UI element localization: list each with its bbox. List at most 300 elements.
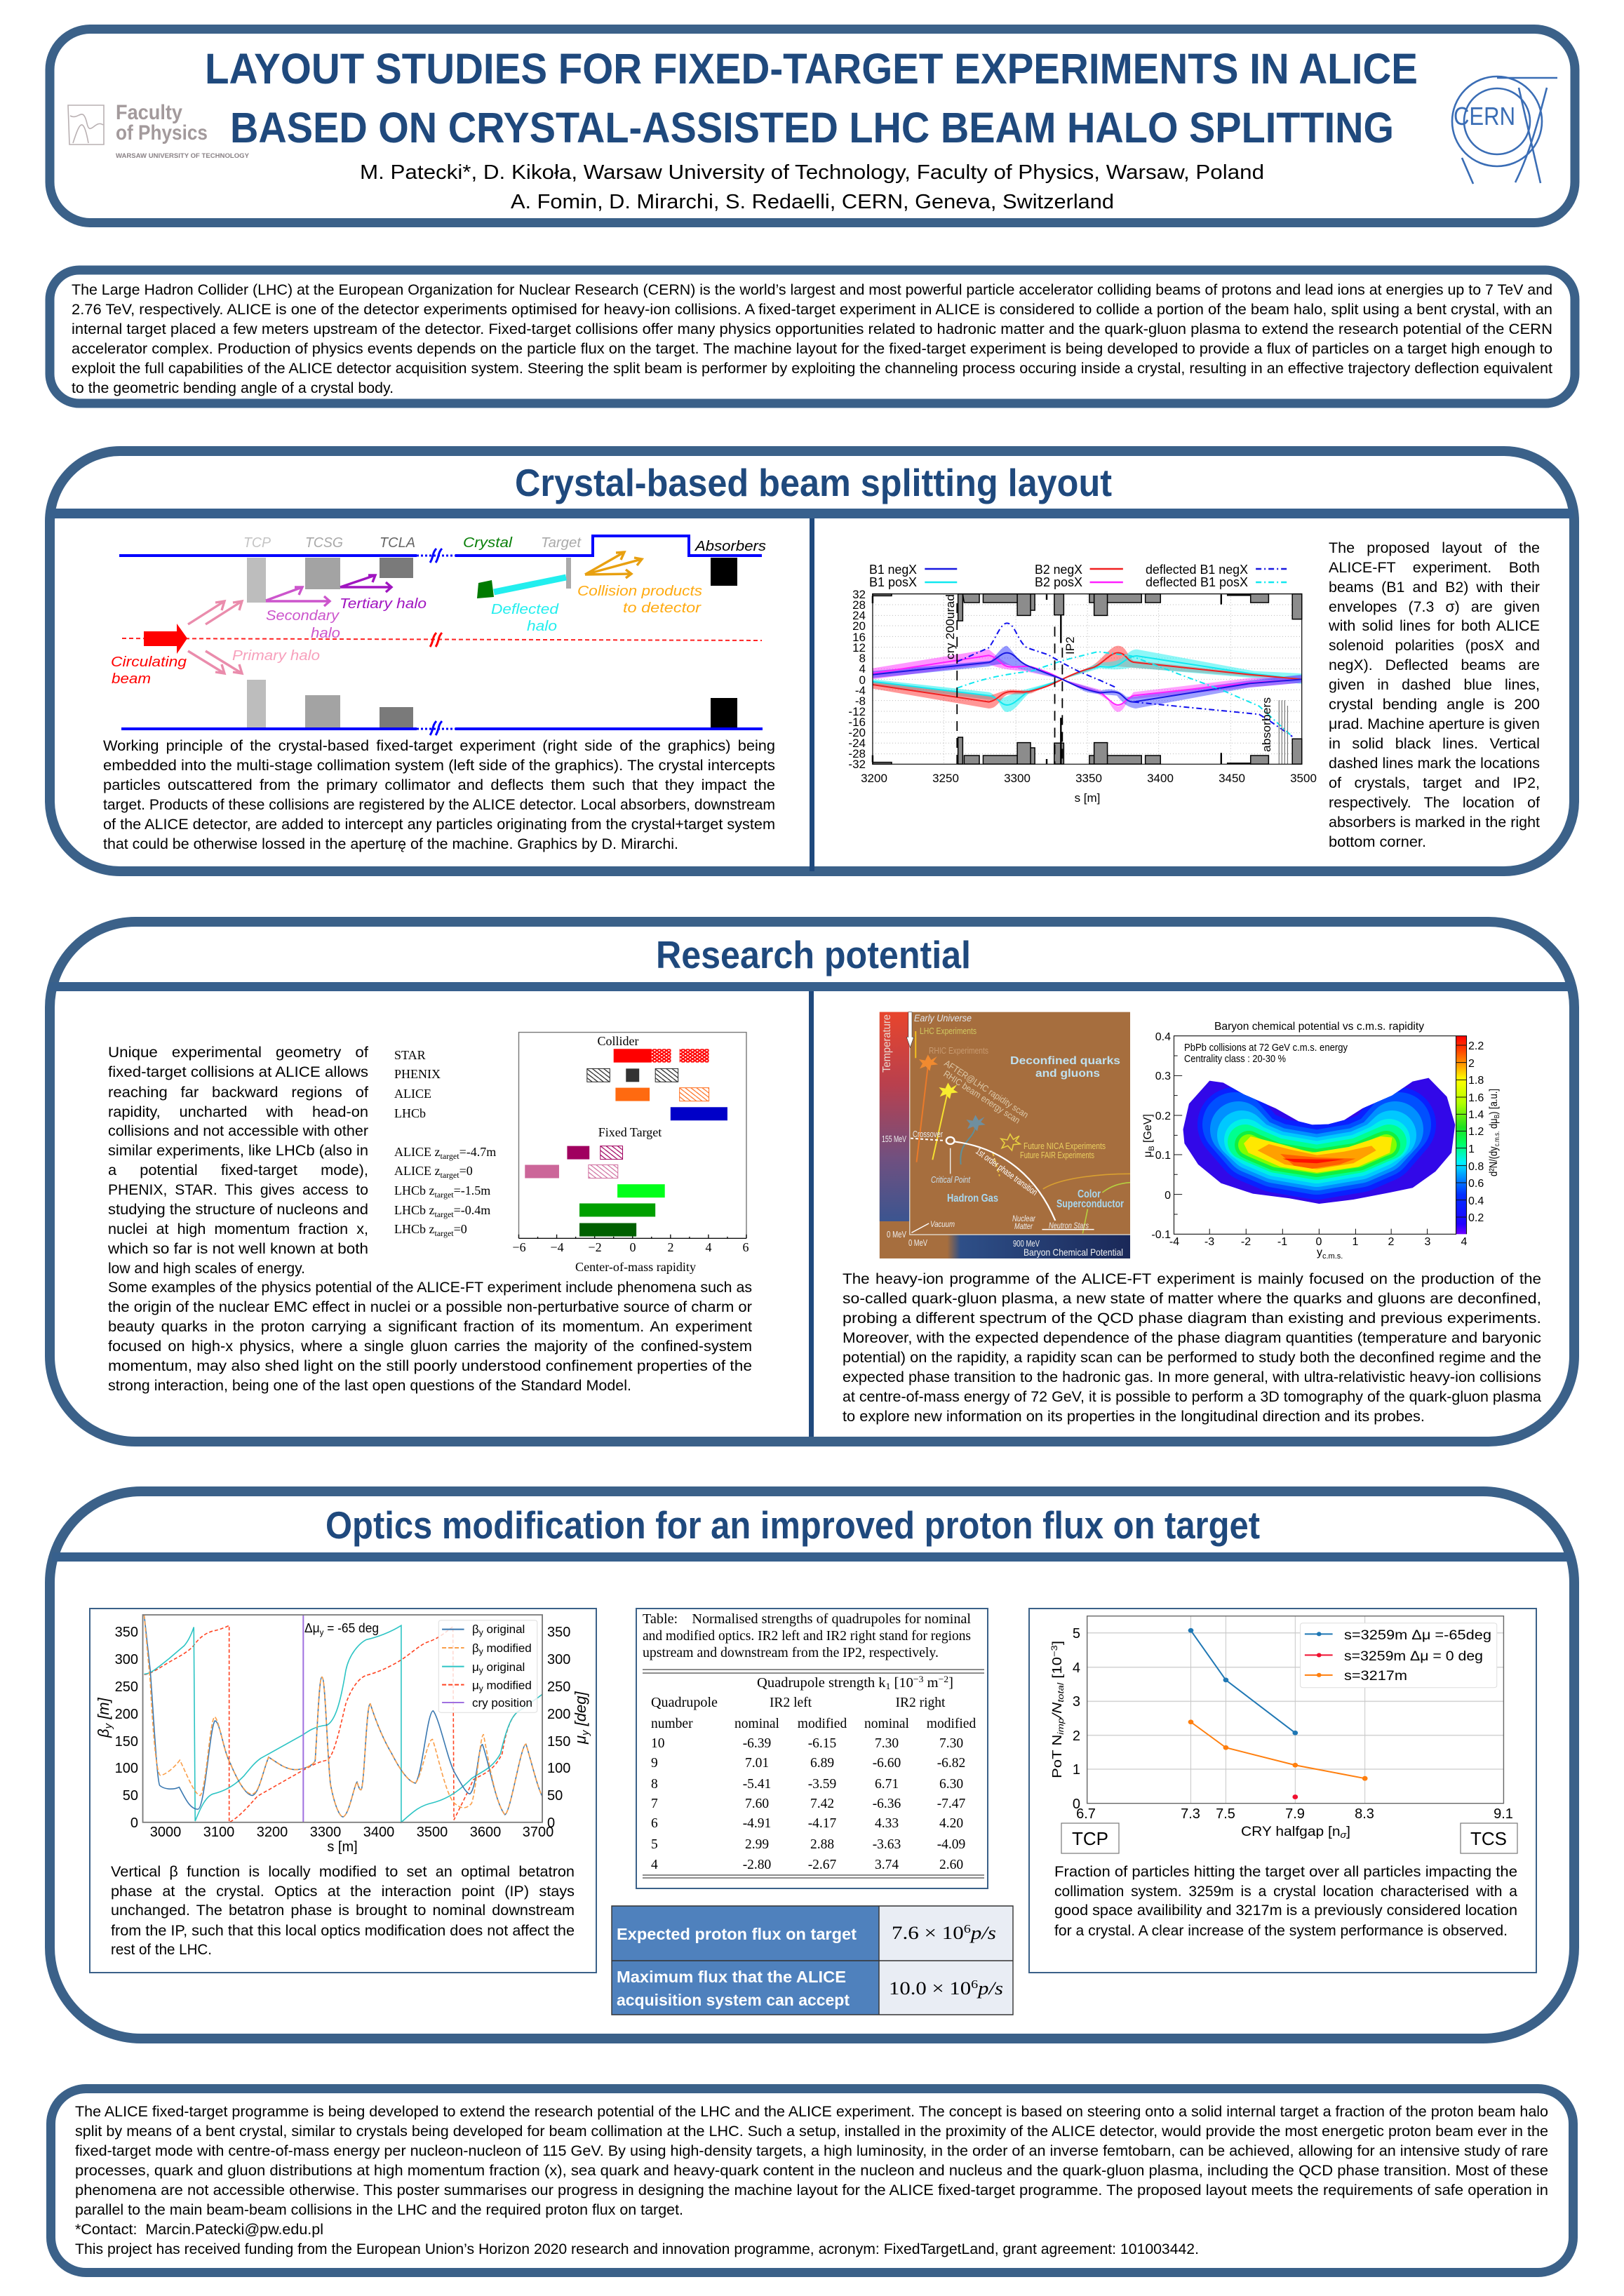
axis labels: μ bbox=[572, 1736, 589, 1744]
axis labels: 0 bbox=[1073, 1797, 1080, 1812]
text block: diagram caption: that could be otherwise lossed in the aperturę of the machine. Graphics by D. Mirarchi. bbox=[103, 836, 678, 852]
table rows: 7.30 bbox=[875, 1736, 899, 1751]
legend: μ bbox=[472, 1660, 479, 1674]
text block: introduction: to the geometric bending angle of a crystal body. bbox=[72, 380, 394, 396]
text block: layout description: given in dashed blue lines, bbox=[1329, 677, 1540, 693]
diagram labels: Deflected bbox=[491, 602, 559, 617]
axis labels: 3100 bbox=[203, 1825, 234, 1840]
envelopes bands bbox=[873, 650, 1062, 679]
inner contour peaks bbox=[1174, 1036, 1467, 1234]
contour axes: c.m.s. bbox=[1322, 1252, 1343, 1261]
contour axes: -1 bbox=[1277, 1236, 1287, 1248]
axis labels: 300 bbox=[547, 1652, 570, 1667]
contour axes: 0.3 bbox=[1155, 1070, 1171, 1082]
text block: performance caption: collimation system. 3259m is a crystal location characterised with a bbox=[1054, 1884, 1517, 1900]
phase diagram labels: 155 MeV bbox=[882, 1134, 906, 1144]
table header: 1 bbox=[886, 1681, 890, 1691]
phase diagram labels: RHIC Experiments bbox=[929, 1045, 988, 1056]
axis labels: s [m] bbox=[327, 1839, 358, 1855]
contour axes: 2.2 bbox=[1468, 1040, 1484, 1052]
axis labels: y bbox=[579, 1729, 591, 1736]
heading: Optics modification for an improved proton flux on target bbox=[326, 1503, 1260, 1547]
table rows: 7 bbox=[651, 1797, 658, 1811]
chart labels: 4 bbox=[706, 1240, 711, 1254]
axis tick labels: 4 bbox=[859, 662, 866, 676]
table rows: 6.30 bbox=[939, 1777, 963, 1792]
table rows: 7.30 bbox=[939, 1736, 963, 1751]
table rows: -6.39 bbox=[743, 1736, 771, 1751]
chart labels: =0 bbox=[454, 1222, 467, 1236]
axis labels: 200 bbox=[547, 1707, 570, 1722]
TCP label box: TCP bbox=[1072, 1828, 1108, 1849]
axis labels: 9.1 bbox=[1494, 1806, 1513, 1822]
table rows: -4.91 bbox=[743, 1816, 771, 1831]
text block: layout description: crystal bending angle is 200 bbox=[1329, 697, 1540, 713]
table header: IR2 left bbox=[770, 1696, 812, 1710]
heading: Crystal-based beam splitting layout bbox=[515, 461, 1112, 504]
envelope curves bbox=[873, 653, 1302, 705]
text block: rapidity coverage: reaching far backward regions of bbox=[108, 1085, 368, 1101]
authors: A. Fomin, D. Mirarchi, S. Redaelli, CERN, Geneva, Switzerland bbox=[511, 191, 1114, 213]
text block: rapidity coverage: similar experiments, like LHCb (also in bbox=[108, 1143, 368, 1159]
title: BASED ON CRYSTAL-ASSISTED LHC BEAM HALO SPLITTING bbox=[230, 104, 1394, 152]
axis labels: 200 bbox=[115, 1707, 138, 1722]
x axis labels: 3200 bbox=[861, 772, 887, 785]
panel: title header bbox=[50, 29, 1575, 223]
contour axes: 0 bbox=[1316, 1236, 1322, 1248]
text block: layout description: beams (B1 and B2) with their bbox=[1329, 579, 1540, 596]
text block: quark-gluon plasma programme bbox=[843, 1271, 1541, 1425]
phase diagram labels: RHIC beam energy scan bbox=[941, 1068, 1022, 1126]
legend: B2 posX bbox=[1035, 575, 1082, 589]
panel: quadrupole strength table bbox=[636, 1609, 988, 1888]
axis labels: 3700 bbox=[523, 1825, 553, 1840]
table rows: -3.63 bbox=[873, 1837, 901, 1852]
axis labels: 350 bbox=[115, 1625, 138, 1640]
contour axes: -0.1 bbox=[1151, 1229, 1171, 1241]
contour axes: -3 bbox=[1204, 1236, 1214, 1248]
axis labels bbox=[95, 1621, 591, 1855]
contour axes: μ bbox=[1142, 1151, 1154, 1157]
text block: introduction bbox=[72, 282, 1552, 396]
table rows: -6.36 bbox=[873, 1797, 901, 1811]
icon: Faculty of Physics logo: WARSAW UNIVERSITY OF TECHNOLOGY bbox=[116, 152, 249, 159]
x axis labels: 3500 bbox=[1290, 772, 1317, 785]
chart labels: Center-of-mass rapidity bbox=[575, 1260, 696, 1274]
contour axes: 3 bbox=[1425, 1236, 1431, 1248]
title: LAYOUT STUDIES FOR FIXED-TARGET EXPERIMENTS IN ALICE bbox=[205, 45, 1418, 93]
phase diagram labels: Matter bbox=[1014, 1221, 1033, 1231]
panel: beta function chart bbox=[90, 1609, 596, 1973]
text block: physics potential bbox=[108, 1280, 752, 1394]
text block: summary: The ALICE fixed-target programme is being developed to extend the research potential of the LHC and the ALICE experiment. The concept is based on steering onto a solid internal target a fraction of the proton beam halo bbox=[75, 2104, 1548, 2120]
table rows: 2.60 bbox=[939, 1858, 963, 1872]
text block: physics potential: strong interaction, being one of the last open questions of the Standard Model. bbox=[108, 1378, 631, 1394]
axis labels: 3600 bbox=[470, 1825, 501, 1840]
diagram labels: Tertiary halo bbox=[340, 596, 427, 612]
axis tick labels: 24 bbox=[852, 609, 866, 622]
axis labels: 8.3 bbox=[1355, 1806, 1374, 1822]
contour axes: B bbox=[1494, 1115, 1501, 1118]
legend bbox=[869, 563, 1248, 589]
diagram labels: Circulating bbox=[111, 654, 187, 670]
aperture bbox=[873, 594, 1302, 764]
table rows: -6.60 bbox=[873, 1756, 901, 1771]
table header: nominal bbox=[864, 1717, 910, 1731]
phase diagram labels: Future FAIR Experiments bbox=[1020, 1150, 1094, 1160]
axis labels: ] bbox=[1050, 1641, 1064, 1645]
table header: IR2 right bbox=[896, 1696, 946, 1710]
text block: layout description: ALICE-FT experiment. Both bbox=[1329, 560, 1540, 576]
text block: summary: This project has received funding from the European Union’s Horizon 2020 research and innovation programme, acronym: FixedTargetLand, grant agreement: 101003442. bbox=[75, 2241, 1199, 2257]
table rows: 7.42 bbox=[810, 1797, 834, 1811]
legend bbox=[1344, 1628, 1491, 1684]
axis tick labels: 32 bbox=[852, 588, 866, 601]
phase diagram labels: Superconductor bbox=[1056, 1198, 1124, 1210]
axis tick labels: 0 bbox=[859, 673, 866, 687]
chart labels: =-1.5m bbox=[454, 1183, 490, 1197]
legend: original bbox=[483, 1660, 525, 1674]
axis tick labels: -24 bbox=[848, 737, 866, 750]
phase diagram labels: Hadron Gas bbox=[947, 1193, 998, 1204]
panel: research potential bbox=[50, 922, 1574, 1442]
text block: rapidity coverage: studying the structure of nucleons and bbox=[108, 1202, 368, 1218]
text block: layout description: absorbers is marked in the right bbox=[1329, 814, 1540, 831]
text block: physics potential: Some examples of the physics potential of the ALICE-FT experiment include phenomena such as bbox=[108, 1280, 752, 1296]
axis tick labels: -8 bbox=[855, 694, 866, 708]
chart labels: 0 bbox=[630, 1240, 636, 1254]
phase diagram labels bbox=[881, 1012, 1124, 1258]
text block: performance caption bbox=[1054, 1864, 1517, 1939]
axis labels: 3200 bbox=[257, 1825, 288, 1840]
crystal and deflected beam bbox=[477, 577, 566, 598]
contour axes: -4 bbox=[1169, 1236, 1179, 1248]
contour axes: 0.8 bbox=[1468, 1161, 1484, 1173]
text block: quark-gluon plasma programme: to explore new information on its properties in the longitudinal direction and its probes. bbox=[843, 1409, 1425, 1425]
chart: QCD phase diagram bbox=[880, 1012, 1130, 1258]
table header bbox=[651, 1674, 976, 1731]
phase diagram labels: Temperature bbox=[881, 1014, 893, 1073]
text block: performance caption: Fraction of particles hitting the target over all particles impacting the bbox=[1054, 1864, 1517, 1880]
legend lines bbox=[925, 568, 957, 570]
table: proton flux: Expected proton flux on target bbox=[617, 1925, 857, 1943]
diagram labels: Collision products bbox=[577, 584, 702, 599]
contour axes: d²N/(dy bbox=[1488, 1140, 1500, 1176]
contour axes: 0.6 bbox=[1468, 1178, 1484, 1190]
axis tick labels: -12 bbox=[848, 705, 866, 718]
chart labels: target bbox=[440, 1151, 459, 1161]
legend: modified bbox=[483, 1642, 532, 1655]
chart: beta and phase vs s bbox=[95, 1615, 591, 1855]
table rows: -3.59 bbox=[808, 1777, 836, 1792]
text block: quark-gluon plasma programme: so-called quark-gluon plasma, a new state of matter where the quarks and gluons are deconfined, bbox=[843, 1291, 1541, 1307]
axis labels: 0 bbox=[130, 1815, 138, 1831]
table rows: -2.80 bbox=[743, 1858, 771, 1872]
table rows: 6 bbox=[651, 1816, 658, 1831]
phase diagram labels: Nuclear bbox=[1012, 1214, 1036, 1223]
chart labels: LHCb z bbox=[394, 1183, 435, 1197]
chart: baryon chemical potential contour bbox=[1142, 1021, 1501, 1261]
collimators bbox=[247, 558, 737, 727]
axis labels: imp bbox=[1056, 1718, 1066, 1735]
chart: beam envelopes versus s bbox=[848, 563, 1317, 805]
table caption bbox=[643, 1612, 972, 1660]
table caption: and modified optics. IR2 left and IR2 right stand for regions bbox=[643, 1629, 971, 1644]
legend: modified bbox=[483, 1679, 532, 1692]
chart labels: −4 bbox=[550, 1240, 564, 1254]
chart labels: =-0.4m bbox=[454, 1203, 490, 1217]
axis labels: 7.9 bbox=[1285, 1806, 1305, 1822]
table: proton flux: Maximum flux that the ALICE bbox=[617, 1968, 846, 1986]
text block: rapidity coverage: which so far is not well known at both bbox=[107, 1241, 368, 1257]
legend: s=3259m Δμ = 0 deg bbox=[1344, 1649, 1483, 1664]
text block: beta caption: from the IP, such that this local optics modification does not affect the bbox=[111, 1923, 575, 1939]
table rows: 7.60 bbox=[745, 1797, 769, 1811]
phase diagram labels: 900 MeV bbox=[1013, 1238, 1040, 1249]
contour axes: 4 bbox=[1461, 1236, 1468, 1248]
phase diagram labels: 1st order phase transition bbox=[974, 1146, 1040, 1197]
contour axes: 2 bbox=[1468, 1058, 1475, 1070]
text block: beta caption: rest of the LHC. bbox=[111, 1942, 212, 1958]
table rows: -6.82 bbox=[937, 1756, 965, 1771]
contour axes: 1.4 bbox=[1468, 1109, 1484, 1121]
x axis labels: 3300 bbox=[1004, 772, 1031, 785]
text block: introduction: 2.76 TeV, respectively. ALICE is one of the detector experiments optimised for heavy-ion collisions. A fixed-target experiment in ALICE is considered to collide a portion of the beam halo, split using a bent crystal, with an bbox=[72, 302, 1552, 318]
axis labels: /N bbox=[1050, 1702, 1064, 1719]
axis labels: [deg] bbox=[572, 1691, 589, 1730]
text block: layout description: solenoid polarities (posX and bbox=[1329, 638, 1540, 654]
text block: summary: phenomena are not accessible otherwise. This poster summarises our progress in designing the machine layout for the ALICE fixed-target programme. The proposed layout meets the requirements of safe operation in bbox=[75, 2182, 1548, 2198]
text block: introduction: The Large Hadron Collider (LHC) at the European Organization for Nuclear Research (CERN) is the world’s largest and most powerful particle accelerator colliding beams of protons and lead ions at energies up to 7 TeV and bbox=[72, 282, 1552, 298]
dashed location markers bbox=[957, 603, 1062, 764]
table: proton flux: acquisition system can accept bbox=[617, 1991, 850, 2009]
contour annotations bbox=[1184, 1042, 1348, 1065]
table rows: -2.67 bbox=[808, 1858, 837, 1872]
x axis labels: 3450 bbox=[1219, 772, 1245, 785]
table: proton flux bbox=[612, 1906, 1013, 2015]
text block: beta caption: phase at the crystal. Optics at the interaction point (IP) stays bbox=[111, 1884, 575, 1900]
chart labels: LHCb bbox=[394, 1106, 426, 1120]
panel: system performance chart bbox=[1029, 1609, 1536, 1973]
axis tick labels: -20 bbox=[848, 726, 866, 739]
table header: −3 bbox=[913, 1674, 923, 1684]
text block: diagram caption bbox=[103, 738, 775, 852]
panel: crystal-based beam splitting layout bbox=[50, 451, 1574, 871]
text block: rapidity coverage: Unique experimental geometry of bbox=[108, 1045, 368, 1061]
chart labels: 6 bbox=[742, 1240, 749, 1254]
legend: s=3217m bbox=[1344, 1669, 1407, 1684]
axis labels: [10 bbox=[1050, 1657, 1064, 1683]
rotated labels: IP2 bbox=[1063, 636, 1077, 654]
chart labels: PHENIX bbox=[394, 1067, 441, 1081]
table rows: -5.41 bbox=[743, 1777, 771, 1792]
table header: number bbox=[651, 1717, 693, 1731]
axis tick labels bbox=[848, 588, 866, 771]
axis tick labels: 20 bbox=[852, 619, 866, 633]
chart labels: LHCb z bbox=[394, 1222, 435, 1236]
text block: layout description: bottom corner. bbox=[1329, 834, 1426, 850]
axis labels bbox=[1049, 1626, 1513, 1840]
text block: diagram caption: target. Products of these collisions are registered by the ALICE detector. Local absorbers, downstream bbox=[103, 797, 775, 813]
contour axes: -2 bbox=[1241, 1236, 1251, 1248]
text block: summary: parallel to the main beam-beam collisions in the LHC and the required proton flux on target. bbox=[75, 2202, 683, 2218]
text block: diagram caption: embedded into the multi-stage collimation system (left side of the graphics). The crystal intercepts bbox=[103, 758, 775, 774]
text block: rapidity coverage: nuclei at high momentum fraction x, bbox=[108, 1221, 368, 1237]
table rows: 4.20 bbox=[939, 1816, 963, 1831]
text block: physics potential: momentum, may also shed light on the still poorly understood confinement properties of the bbox=[108, 1358, 752, 1374]
text block: introduction: accelerator complex. Production of physics events depends on the particle flux on the target. The machine layout for the fixed-target experiment is being developed to provide a flux of particles on a target high enough to bbox=[72, 341, 1552, 357]
text block: beta caption: unchanged. The betatron phase is brought to nominal downstream bbox=[111, 1902, 575, 1919]
diagram labels: to detector bbox=[623, 600, 702, 616]
chart labels: target bbox=[435, 1209, 454, 1219]
table: proton flux: 7.6 × 10 bbox=[892, 1923, 952, 1943]
table rows: 2.99 bbox=[745, 1837, 769, 1852]
axis labels: Δμ bbox=[304, 1621, 320, 1635]
table rows: 6.89 bbox=[810, 1756, 834, 1771]
contour axes: 1.8 bbox=[1468, 1075, 1484, 1087]
text block: layout description: dashed lines mark the locations bbox=[1329, 756, 1540, 772]
table: proton flux: p/s bbox=[977, 1978, 1003, 1999]
legend: B1 posX bbox=[869, 575, 917, 589]
axis labels: CRY halfgap [n bbox=[1241, 1825, 1331, 1839]
text block: summary: split by means of a bent crystal, similar to crystals being developed for beam collimation at the LHC. Such a setup, installed in the proximity of the ALICE detector, would provide the most energetic proton beam ever in the bbox=[75, 2123, 1548, 2140]
axis tick labels: -4 bbox=[855, 684, 866, 697]
text block: rapidity coverage: fixed-target collisions at ALICE allows bbox=[108, 1064, 368, 1080]
contour axes: 1 bbox=[1353, 1236, 1359, 1248]
text block: layout description bbox=[1328, 540, 1540, 850]
axis labels: [m] bbox=[95, 1697, 112, 1724]
text block: quark-gluon plasma programme: at centre-of-mass energy of 72 GeV, it is possible to perform a 3D tomography of the quark-gluon plasma bbox=[843, 1389, 1541, 1405]
phase diagram labels: and gluons bbox=[1035, 1068, 1100, 1080]
table caption: upstream and downstream from the IP2, respectively. bbox=[643, 1646, 939, 1660]
phase diagram labels: Color bbox=[1078, 1188, 1101, 1200]
axis labels: 100 bbox=[547, 1761, 570, 1776]
table rows: 2.88 bbox=[810, 1837, 834, 1852]
axis labels: 250 bbox=[547, 1679, 570, 1695]
axis tick labels: -28 bbox=[848, 747, 866, 760]
table rows: 5 bbox=[651, 1837, 658, 1852]
axis labels: 7.3 bbox=[1181, 1806, 1200, 1822]
axis labels: 100 bbox=[115, 1761, 138, 1776]
text block: layout description: in solid black lines. Vertical bbox=[1329, 736, 1540, 752]
arrows: halo and collision products bbox=[188, 552, 642, 673]
axis labels: 150 bbox=[115, 1734, 138, 1750]
chart labels: =-4.7m bbox=[459, 1145, 496, 1159]
text block: rapidity coverage: low and high scales of energy. bbox=[108, 1261, 305, 1277]
table rows: -4.17 bbox=[808, 1816, 837, 1831]
diagram labels: TCP bbox=[243, 535, 271, 551]
diagram labels: halo bbox=[311, 626, 340, 641]
table: proton flux: 6 bbox=[964, 1922, 971, 1935]
x axis labels: 3350 bbox=[1075, 772, 1102, 785]
authors: M. Patecki*, D. Kikoła, Warsaw University of Technology, Faculty of Physics, Warsaw, Poland bbox=[360, 161, 1264, 184]
legend: y bbox=[479, 1646, 483, 1656]
text block: quark-gluon plasma programme: probing a different spectrum of the QCD phase diagram than existing and previous experiments. bbox=[843, 1310, 1541, 1327]
axis tick labels: 28 bbox=[852, 598, 866, 612]
axis labels: PoT N bbox=[1050, 1743, 1064, 1778]
contour annotations: Centrality class : 20-30 % bbox=[1184, 1053, 1286, 1065]
table rows: 8 bbox=[651, 1777, 658, 1792]
table header: Quadrupole bbox=[651, 1696, 718, 1710]
icon: CERN logo bbox=[1452, 76, 1557, 184]
table caption: Table: Normalised strengths of quadrupoles for nominal bbox=[643, 1612, 972, 1627]
legend: y bbox=[479, 1665, 483, 1675]
text block: quark-gluon plasma programme: Moreover, with the expected dependence of the phase diagram quantities (temperature and baryonic bbox=[843, 1330, 1541, 1346]
TCS label box: TCS bbox=[1470, 1828, 1507, 1849]
diagram labels: beam bbox=[112, 671, 151, 687]
axis labels: 250 bbox=[115, 1679, 138, 1695]
axis labels: 350 bbox=[547, 1625, 570, 1640]
axis labels: 1 bbox=[1073, 1762, 1080, 1778]
grid lines bbox=[873, 594, 1302, 764]
table header: [10 bbox=[890, 1676, 913, 1691]
axis labels: ] bbox=[1346, 1825, 1350, 1839]
axis labels: 6.7 bbox=[1076, 1806, 1096, 1822]
text block: physics potential: the origin of the nuclear EMC effect in nuclei or a possible non-perturbative source of charm or bbox=[108, 1299, 752, 1315]
contour levels bbox=[1235, 1124, 1399, 1163]
axis labels: 3000 bbox=[150, 1825, 181, 1840]
rotated labels: cry 200urad bbox=[944, 594, 957, 659]
axis labels: −3 bbox=[1049, 1645, 1059, 1657]
axis labels: 3 bbox=[1073, 1694, 1080, 1710]
chart labels: 2 bbox=[668, 1240, 673, 1254]
text block: rapidity coverage: a potential fixed-target mode), bbox=[108, 1162, 368, 1179]
table header: nominal bbox=[734, 1717, 780, 1731]
chart: rapidity coverage bars bbox=[394, 1033, 749, 1274]
contour axes: 2 bbox=[1388, 1236, 1395, 1248]
contour axes: B bbox=[1148, 1146, 1156, 1151]
axis labels: 4 bbox=[1073, 1660, 1080, 1676]
rotated labels: absorbers bbox=[1260, 697, 1273, 752]
diagram: collimation and fixed-target working principle bbox=[111, 535, 766, 735]
axis tick labels: -16 bbox=[848, 716, 866, 729]
chart labels: ALICE z bbox=[394, 1164, 440, 1178]
diagram labels bbox=[111, 535, 766, 687]
diagram labels: Absorbers bbox=[694, 539, 766, 554]
contour axes: 1 bbox=[1468, 1143, 1475, 1155]
chart labels: target bbox=[435, 1190, 454, 1200]
text block: layout description: with solid lines for both ALICE bbox=[1328, 618, 1540, 634]
diagram labels: Crystal bbox=[463, 535, 513, 551]
phase diagram labels: Vacuum bbox=[930, 1219, 955, 1229]
text block: beta caption: Vertical β function is locally modified to set an optimal betatron bbox=[111, 1864, 575, 1880]
text block: quark-gluon plasma programme: The heavy-ion programme of the ALICE-FT experiment is mainly focused on the production of the bbox=[843, 1271, 1541, 1287]
frame and colour bar bbox=[1456, 1036, 1467, 1234]
legend: y bbox=[479, 1627, 483, 1637]
text block: physics potential: focused on high-x physics, where a single gluon carries the majority of the confined-system bbox=[108, 1338, 752, 1355]
axis labels: 3500 bbox=[417, 1825, 448, 1840]
authors bbox=[360, 161, 1264, 213]
legend: β bbox=[472, 1623, 479, 1636]
table header: Quadrupole strength k bbox=[757, 1676, 879, 1691]
title: Baryon chemical potential vs c.m.s. rapidity bbox=[1214, 1021, 1424, 1033]
phase diagram labels: 0 MeV bbox=[887, 1229, 906, 1240]
diagram labels: Target bbox=[541, 535, 582, 551]
deflected beams bbox=[957, 623, 1292, 737]
axis labels: 50 bbox=[547, 1788, 563, 1804]
axis labels: 300 bbox=[115, 1652, 138, 1667]
text block: layout description: The proposed layout of the bbox=[1329, 540, 1540, 556]
heading: Research potential bbox=[656, 933, 971, 976]
phase diagram labels: AFTER@LHC rapidity scan bbox=[942, 1058, 1031, 1120]
table rows: -7.47 bbox=[937, 1797, 966, 1811]
text block: layout description: of crystals, target and IP2, bbox=[1329, 775, 1540, 791]
contour axes: 0 bbox=[1165, 1190, 1171, 1202]
chart labels: Fixed Target bbox=[598, 1125, 662, 1139]
contour axes: dμ bbox=[1488, 1118, 1500, 1132]
legend: original bbox=[483, 1623, 525, 1636]
diagram labels: TCSG bbox=[305, 535, 343, 551]
